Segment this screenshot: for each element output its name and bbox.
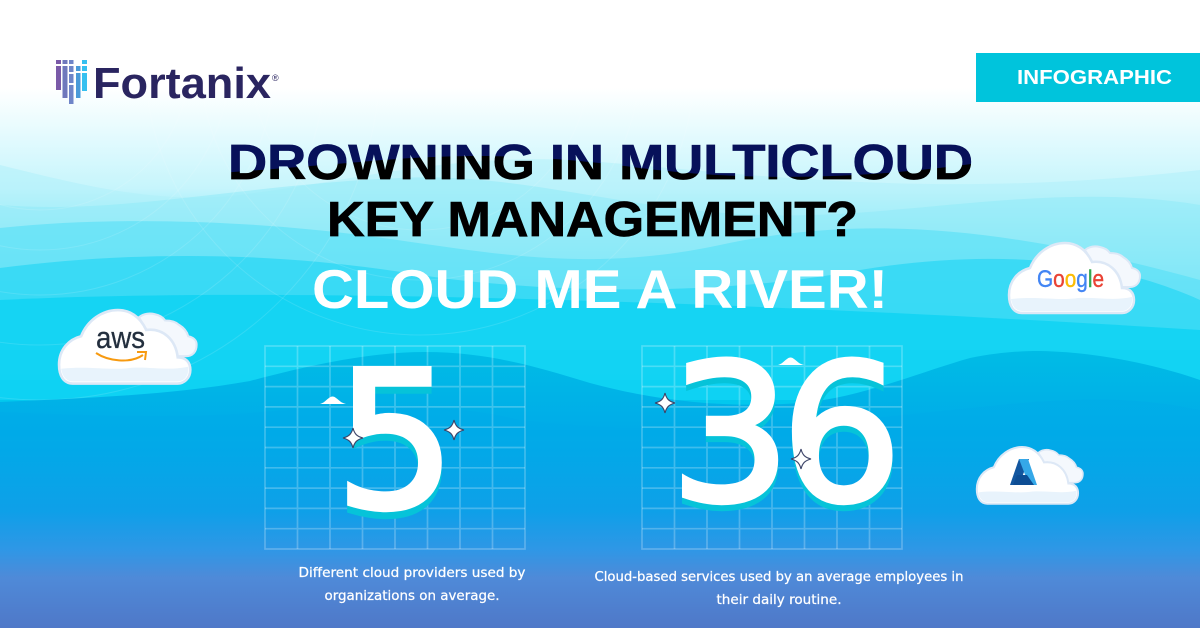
aws wordmark: aws [96,320,145,355]
grid [265,346,525,549]
number 36: 36 [670,330,902,551]
caption: organizations on average. [324,588,500,604]
panel: statistic 5 [265,331,526,604]
registered mark: ® [272,73,279,83]
caption: their daily routine. [716,592,842,608]
badge: infographic [976,53,1200,102]
caption: Cloud-based services used by an average employees in [594,569,964,585]
title [228,136,973,247]
cloud: Azure [977,447,1083,504]
icon: small cloud [778,358,804,365]
subtitle: CLOUD ME A RIVER! [312,258,888,320]
panel: statistic 36 [594,324,964,608]
badge: infographic: INFOGRAPHIC [1017,67,1172,89]
decorative contour lines [0,0,695,400]
icon: sparkle [343,428,363,448]
google wordmark: Google [1037,266,1104,293]
cloud: Google [1009,243,1140,313]
grid [642,346,902,549]
title: DROWNING IN MULTICLOUD [228,136,973,190]
logo: Fortanix [56,59,279,108]
number 5: 5 [335,331,456,552]
number 5: 5 [335,338,456,559]
title: KEY MANAGEMENT? [327,193,858,247]
icon: Fortanix bars [56,60,87,104]
aws smile arrow [96,352,146,361]
logo wordmark: Fortanix [93,59,272,108]
number 36: 36 [670,324,902,545]
icon: sparkle [444,420,464,440]
cloud: AWS [59,310,197,384]
icon: Azure A [1010,459,1037,485]
icon: small cloud [320,396,346,404]
caption [298,565,526,604]
caption [594,569,964,608]
caption: Different cloud providers used by [298,565,526,581]
icon: sparkle [655,393,675,413]
icon: sparkle [791,449,811,469]
